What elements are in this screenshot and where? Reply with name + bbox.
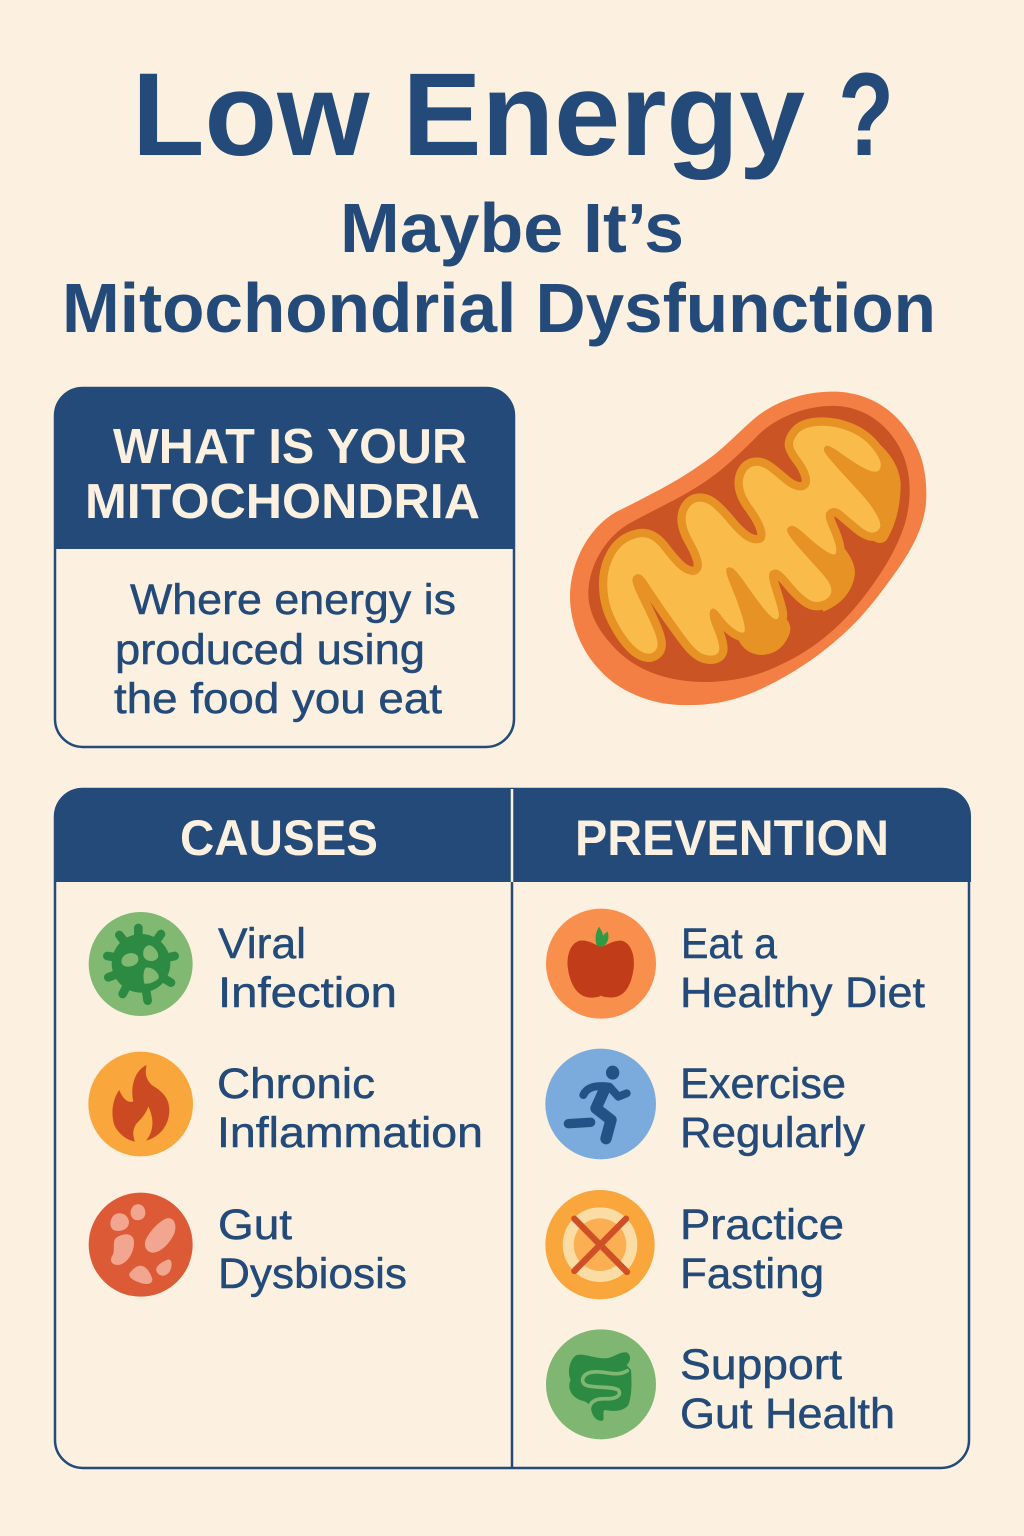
prevention: gut health — [546, 1329, 895, 1439]
cause: viral infection — [89, 912, 397, 1017]
label: viral infection: Viral — [218, 920, 306, 968]
label: gut dysbiosis — [218, 1201, 407, 1298]
label: exercise: Regularly — [680, 1109, 866, 1157]
panel header — [54, 387, 515, 549]
label: gut dysbiosis: Dysbiosis — [218, 1250, 407, 1298]
icon: apple — [546, 909, 656, 1019]
label: fasting — [680, 1201, 844, 1298]
label: chronic inflammation — [217, 1060, 483, 1157]
label: fasting: Practice — [680, 1201, 844, 1249]
label: gut health — [680, 1341, 895, 1438]
prevention: healthy diet — [546, 909, 925, 1019]
panel heading: MITOCHONDRIA — [85, 475, 480, 529]
panel body text: Where energy is — [130, 576, 456, 624]
icon: gut bacteria — [89, 1193, 193, 1297]
panel body text: produced using — [115, 626, 425, 674]
title: Mitochondrial Dysfunction — [62, 269, 936, 347]
icon: runner — [545, 1049, 656, 1159]
label: exercise: Exercise — [680, 1060, 846, 1108]
title: Low Energy — [132, 49, 805, 181]
prevention: fasting — [545, 1190, 844, 1299]
label: gut health: Support — [680, 1341, 842, 1389]
label: healthy diet — [680, 920, 925, 1017]
panel heading: WHAT IS YOUR — [113, 420, 467, 474]
cause: chronic inflammation — [88, 1052, 483, 1157]
panel heading — [85, 420, 480, 529]
cause: gut dysbiosis — [89, 1193, 407, 1298]
title: Maybe It’s — [340, 189, 684, 267]
title — [62, 49, 936, 347]
label: viral infection — [218, 920, 397, 1017]
panel body text — [114, 576, 456, 723]
label: fasting: Fasting — [680, 1250, 824, 1298]
title: ? — [838, 49, 894, 181]
label: healthy diet: Healthy Diet — [680, 969, 925, 1017]
heading: causes: CAUSES — [180, 810, 378, 866]
label: viral infection: Infection — [218, 969, 397, 1017]
panel body text: the food you eat — [114, 675, 442, 723]
panel: what is your mitochondria — [54, 387, 515, 747]
icon: mitochondrion illustration — [570, 392, 926, 705]
heading: prevention: PREVENTION — [575, 810, 889, 866]
prevention: exercise — [545, 1049, 866, 1159]
label: gut dysbiosis: Gut — [218, 1201, 292, 1249]
label: healthy diet: Eat a — [681, 920, 777, 968]
icon: crossed plate — [545, 1190, 655, 1299]
icon: virus — [89, 912, 193, 1016]
table header — [54, 788, 971, 882]
label: chronic inflammation: Chronic — [217, 1060, 375, 1108]
panel: causes and prevention table — [54, 788, 971, 1468]
icon: flame — [88, 1052, 193, 1156]
label: gut health: Gut Health — [680, 1390, 895, 1438]
label: exercise — [680, 1060, 866, 1157]
icon: intestines — [546, 1329, 656, 1439]
label: chronic inflammation: Inflammation — [217, 1109, 483, 1157]
